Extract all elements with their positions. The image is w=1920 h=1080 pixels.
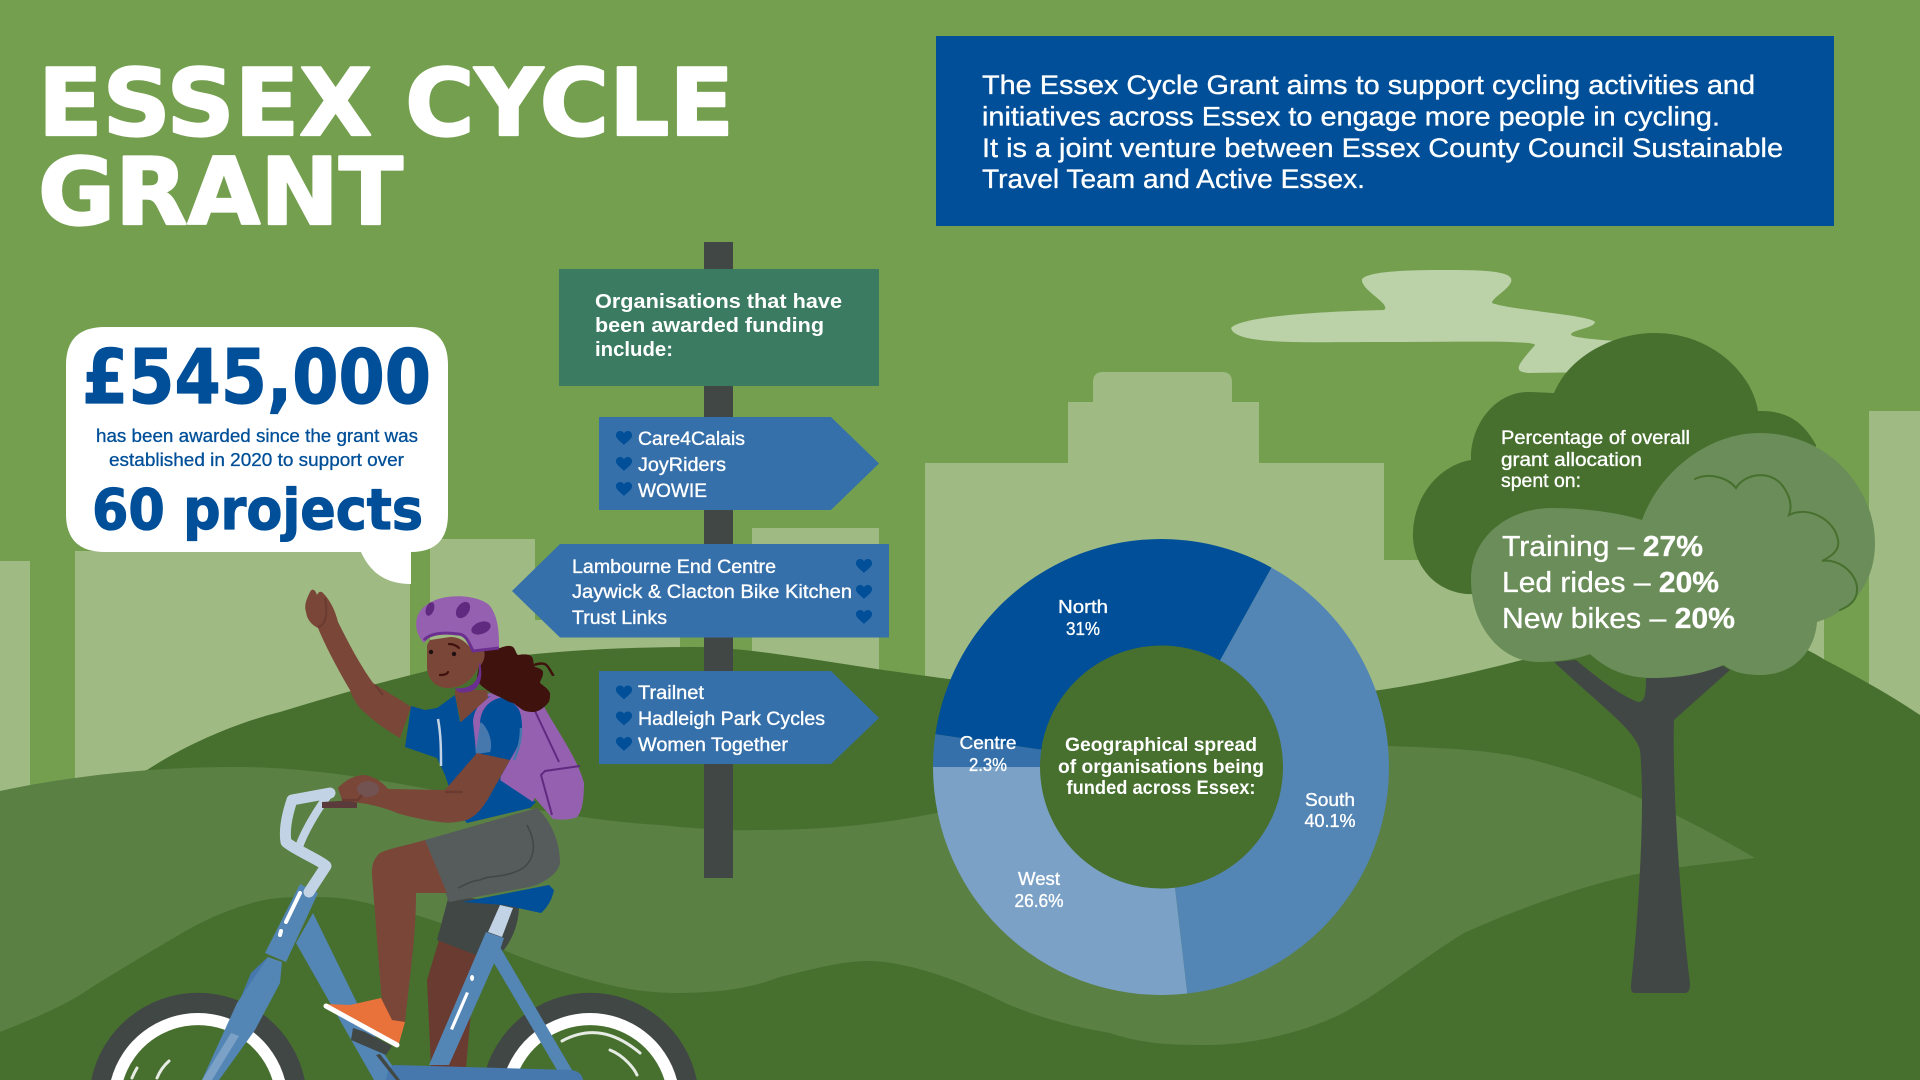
donut segment labels: North: [1058, 596, 1108, 617]
arrow sign 3: Trailnet: [638, 683, 705, 704]
arrow sign 1: JoyRiders: [638, 455, 726, 476]
helmet: [416, 596, 499, 651]
donut centre text: Geographical spread: [1065, 735, 1257, 756]
stays and seat tube: [494, 947, 572, 1070]
orange shoe: [326, 998, 405, 1047]
dark canopy: [1413, 333, 1816, 600]
arrow sign 3: Hadleigh Park Cycles: [638, 709, 825, 730]
cloud of smoke: [1231, 270, 1630, 373]
tree trunk: [1554, 660, 1730, 993]
segment: West 26.6%: [933, 767, 1187, 995]
shirt detail: [438, 719, 441, 766]
face: [427, 637, 485, 688]
tree text: percentage of grant allocation: Led rides – 20%: [1502, 567, 1719, 599]
light canopy: [1471, 433, 1875, 678]
shorts: [425, 808, 560, 902]
intro panel: Travel Team and Active Essex.: [982, 164, 1365, 194]
arrow sign 2: [512, 544, 889, 638]
bottom bracket: [386, 1065, 583, 1080]
right wheel: [483, 993, 697, 1080]
funding description: established in 2020 to support over: [109, 449, 404, 470]
neck: [455, 690, 488, 722]
under shorts: [437, 895, 519, 955]
segment: Centre 2.3%: [933, 734, 1161, 767]
middle hill: [0, 744, 1755, 1045]
hair: [477, 645, 550, 712]
donut centre text: of organisations being: [1058, 757, 1264, 778]
donut centre text: [1058, 735, 1264, 799]
donut segment labels: 40.1%: [1304, 810, 1356, 831]
pedal: [351, 1028, 392, 1055]
head tube: [265, 884, 318, 962]
arrow sign 2: Lambourne End Centre: [572, 557, 776, 578]
donut hole: [1040, 646, 1283, 888]
arrow sign 2: Trust Links: [572, 608, 667, 629]
arrow sign 3: Women Together: [638, 735, 789, 756]
post: [704, 242, 733, 878]
heading sign: [559, 269, 879, 386]
donut segment labels: 26.6%: [1014, 890, 1064, 911]
donut segment labels: 2.3%: [969, 754, 1007, 775]
intro panel: initiatives across Essex to engage more people in cycling.: [982, 102, 1720, 132]
arrow sign 3: [599, 671, 879, 764]
city skyline background: [0, 372, 1920, 861]
tree text: percentage of grant allocation: Percentage of overall: [1501, 428, 1690, 449]
down tube: [296, 913, 402, 1080]
donut segment labels: [960, 596, 1356, 911]
bike frame: [202, 793, 583, 1080]
funding amount: £545,000: [82, 333, 431, 421]
donut segment labels: 31%: [1066, 618, 1100, 639]
donut segment labels: Centre: [960, 732, 1016, 753]
speech bubble callout: [66, 327, 448, 584]
shorts crease: [458, 825, 533, 888]
bubble shape: [66, 327, 448, 584]
back leg: [427, 940, 476, 1068]
tree: [1413, 333, 1875, 993]
fork shadow: [239, 957, 275, 1005]
title: GRANT: [38, 138, 403, 246]
left wheel: [91, 993, 305, 1080]
riding arm and hand: [338, 753, 510, 823]
saddle: [462, 885, 554, 913]
canopy outline detail: [1695, 475, 1857, 610]
cyclist on bicycle: [91, 590, 697, 1080]
shirt: [405, 695, 536, 823]
arrow sign 1: [599, 417, 879, 510]
arrow sign 2: Jaywick & Clacton Bike Kitchen: [572, 582, 852, 603]
funding description: [96, 425, 418, 470]
seat post: [488, 905, 513, 937]
segment: North 31%: [935, 539, 1272, 767]
donut segment labels: South: [1305, 789, 1355, 810]
title: [38, 49, 734, 246]
intro panel: [936, 36, 1834, 226]
arrow sign 1: WOWIE: [638, 481, 707, 502]
project count: 60 projects: [92, 478, 423, 543]
fork: [202, 957, 282, 1080]
stem and handlebars: [285, 793, 330, 892]
donut segment labels: West: [1018, 868, 1060, 889]
tree text: percentage of grant allocation: [1501, 428, 1735, 635]
arrow sign 1: Care4Calais: [638, 429, 745, 450]
donut centre text: funded across Essex:: [1066, 778, 1256, 799]
facial features: [429, 644, 459, 675]
tree text: percentage of grant allocation: spent on:: [1501, 471, 1581, 492]
heading sign: include:: [595, 338, 673, 361]
tree text: percentage of grant allocation: Training – 27%: [1502, 531, 1703, 563]
tree text: percentage of grant allocation: New bikes – 20%: [1502, 603, 1735, 635]
signpost: [512, 242, 889, 878]
grip: [322, 800, 357, 808]
raised arm and hand: [305, 590, 411, 738]
intro panel: It is a joint venture between Essex County Council Sustainable: [982, 133, 1783, 163]
front leg: [372, 840, 447, 1022]
backpack: [472, 693, 584, 820]
intro panel: The Essex Cycle Grant aims to support cycling activities and: [982, 70, 1755, 100]
heading sign: been awarded funding: [595, 314, 824, 337]
funding description: has been awarded since the grant was: [96, 425, 418, 446]
back hill: [0, 630, 1920, 1080]
heading sign: Organisations that have: [595, 290, 842, 313]
tree text: percentage of grant allocation: grant allocation: [1501, 450, 1642, 471]
helmet strap: [455, 662, 481, 693]
title: ESSEX CYCLE: [38, 49, 734, 157]
segment: South 40.1%: [1161, 568, 1389, 994]
donut chart: geographical spread: [933, 539, 1389, 995]
